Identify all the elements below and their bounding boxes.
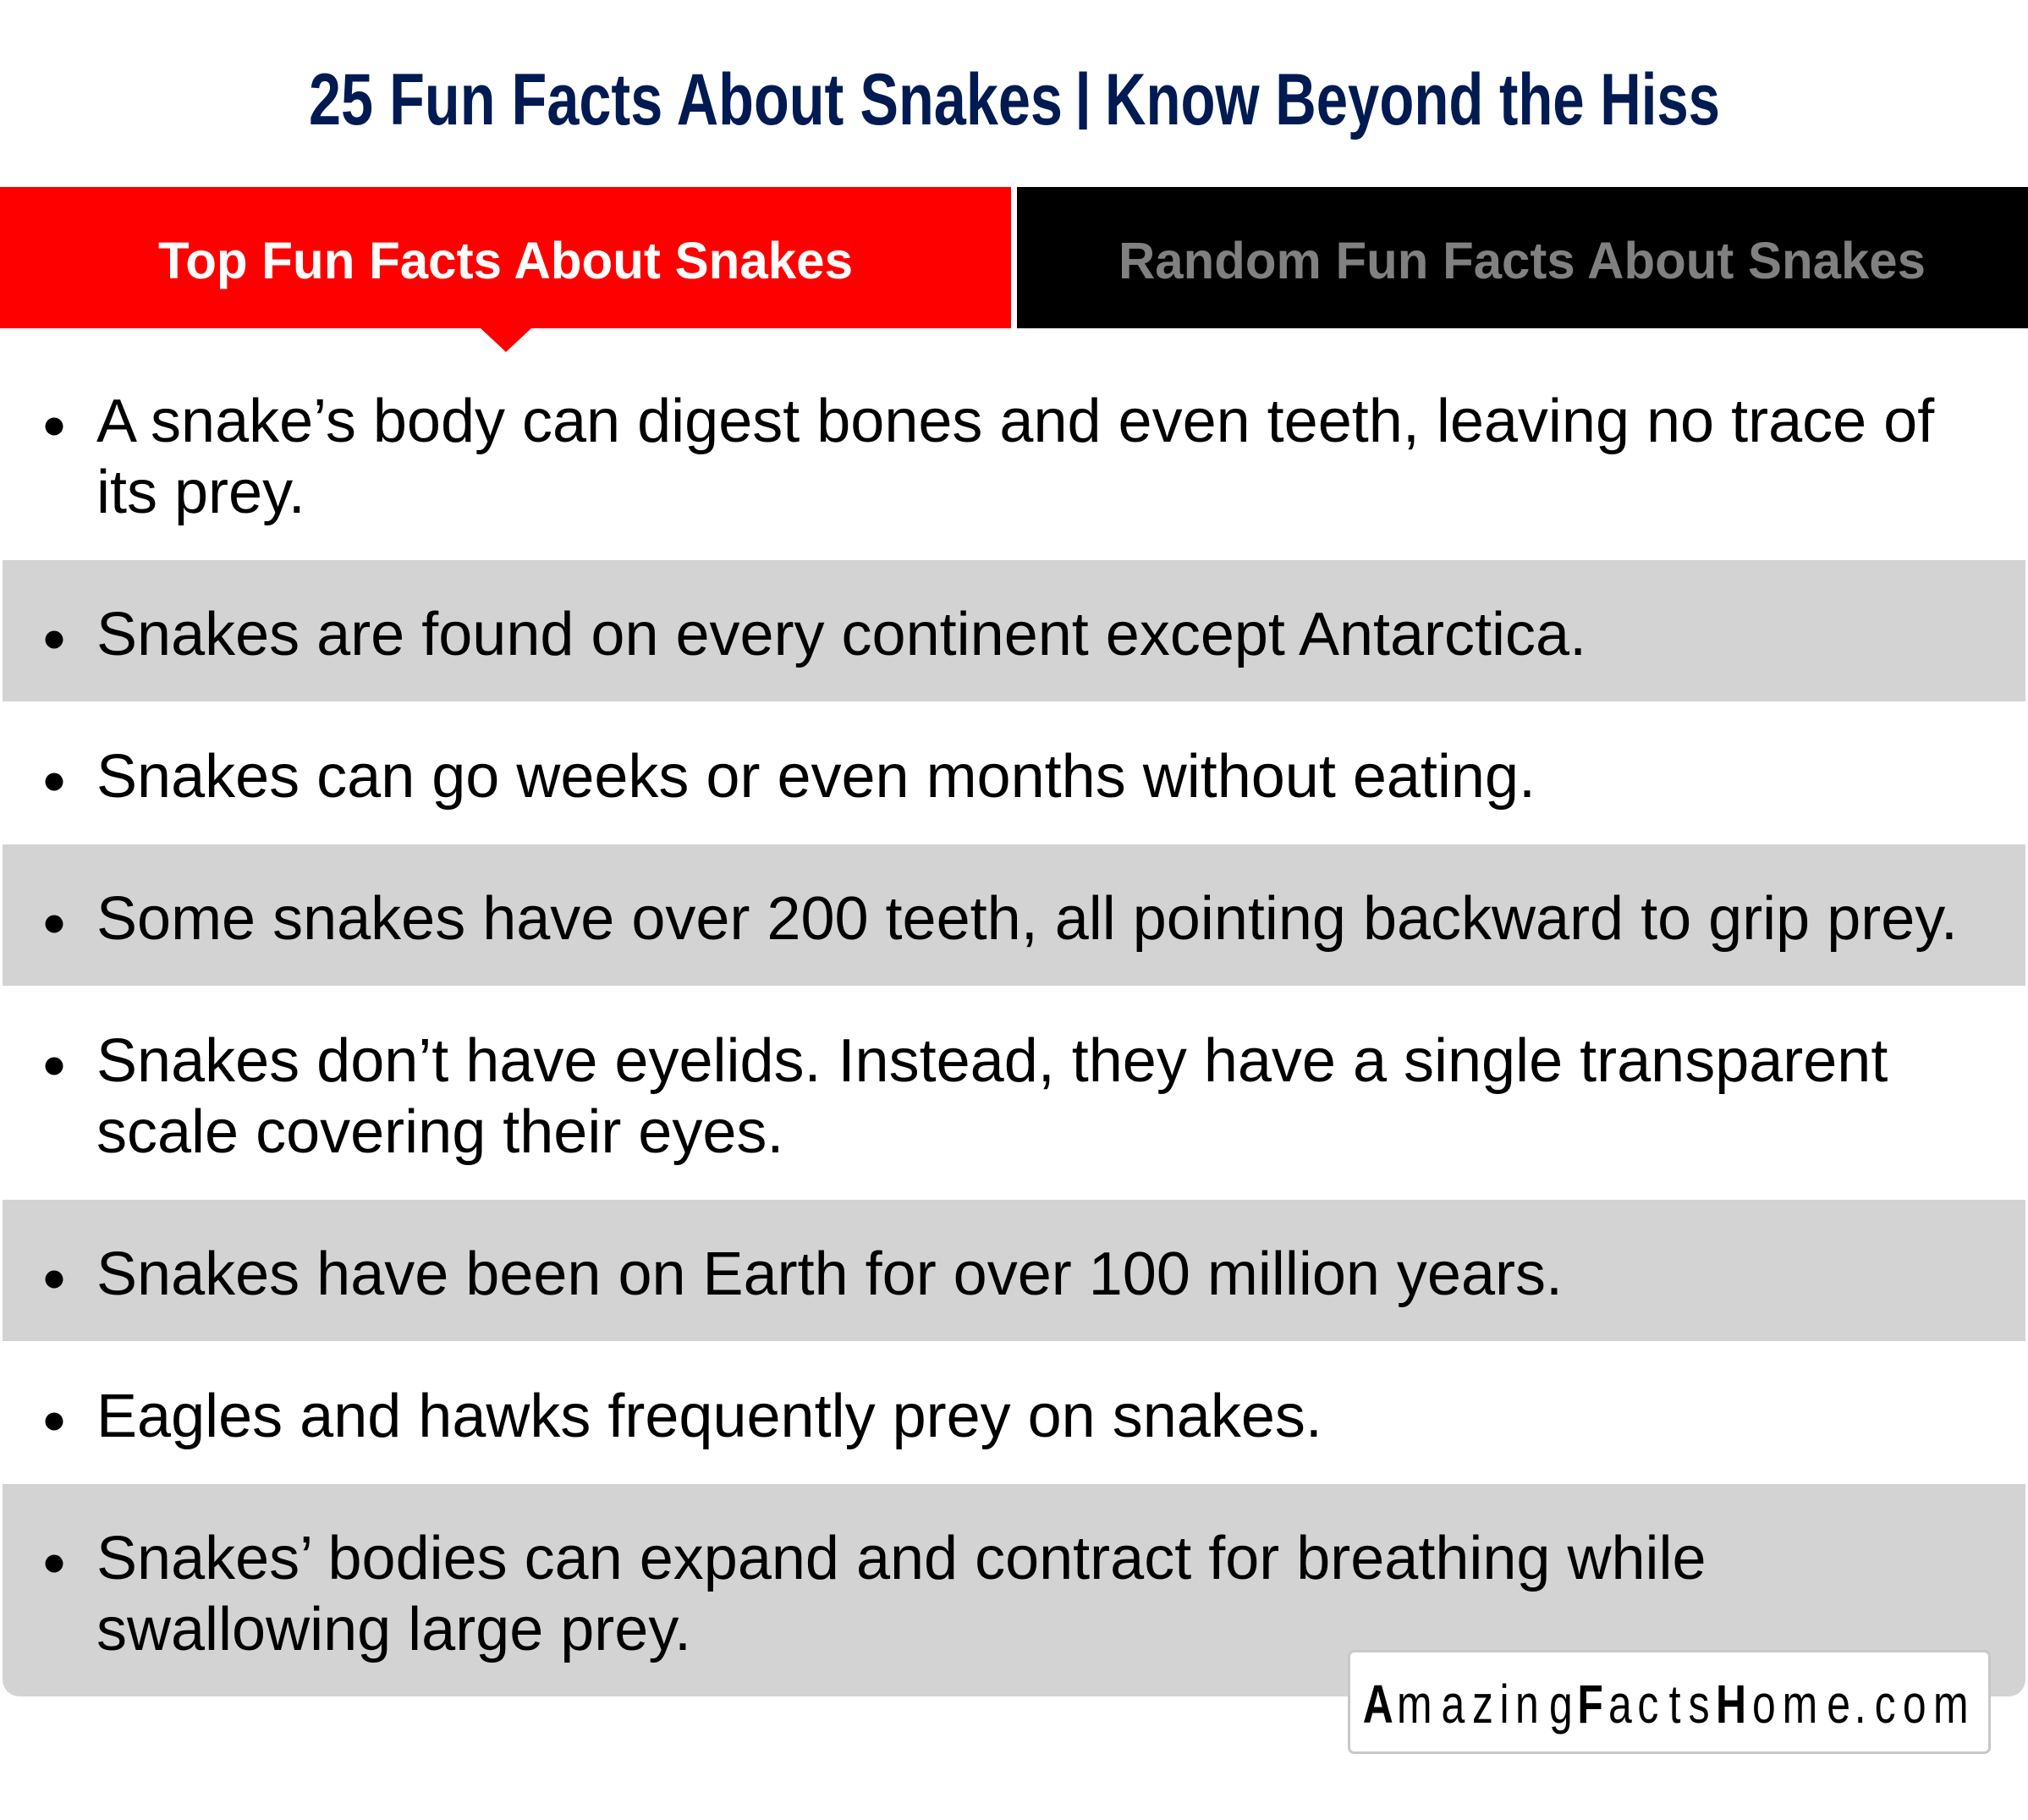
fact 5 [46, 1027, 1888, 1166]
tab: random fun facts (inactive): Random Fun Facts About Snakes [1118, 232, 1926, 289]
fact 8 [3, 1484, 2025, 1696]
fact 4 [3, 844, 2025, 986]
title [309, 59, 1720, 140]
watermark badge [1349, 1652, 1990, 1753]
fact 8: swallowing large prey. [96, 1596, 691, 1663]
tab: top fun facts (active): Top Fun Facts About Snakes [158, 232, 853, 289]
fact 3: Snakes can go weeks or even months without eating. [96, 743, 1536, 811]
fact 6 [3, 1200, 2025, 1341]
title: 25 Fun Facts About Snakes [309, 59, 1063, 140]
fact 2 [3, 560, 2025, 701]
tab: random fun facts (inactive) [1017, 187, 2028, 328]
fact 1 [46, 388, 1935, 526]
title: | [1074, 62, 1091, 129]
fact 1: A snake’s body can digest bones and even teeth, leaving no trace of [96, 388, 1935, 455]
fact 2: Snakes are found on every continent except Antarctica. [96, 601, 1586, 668]
tab: top fun facts (active) [0, 187, 1011, 352]
fact 8: Snakes’ bodies can expand and contract for breathing while [96, 1525, 1706, 1592]
fact 5: scale covering their eyes. [96, 1098, 783, 1166]
fact 1: its prey. [96, 459, 305, 526]
fact 5: Snakes don’t have eyelids. Instead, they have a single transparent [96, 1027, 1888, 1095]
fact 7: Eagles and hawks frequently prey on snakes. [96, 1383, 1322, 1450]
watermark badge: AmazingFactsHome.com [1363, 1674, 1969, 1735]
fact 6: Snakes have been on Earth for over 100 million years. [96, 1240, 1563, 1308]
fact 4: Some snakes have over 200 teeth, all pointing backward to grip prey. [96, 885, 1958, 953]
title: Know Beyond the Hiss [1105, 59, 1720, 140]
